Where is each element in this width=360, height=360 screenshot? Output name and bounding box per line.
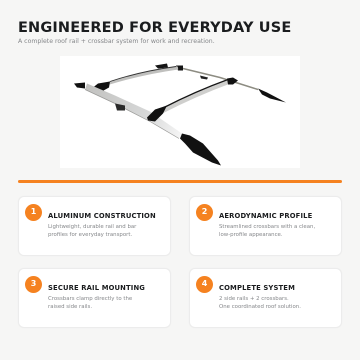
card 1 heading: ALUMINUM CONSTRUCTION [48,212,156,220]
card 2 text: Streamlined crossbars with a clean, [219,224,315,230]
orange divider [18,180,342,183]
card 3 heading: SECURE RAIL MOUNTING [48,284,145,292]
card 3 [18,268,171,328]
card 4 heading: COMPLETE SYSTEM [219,284,295,292]
card 2 text [219,224,315,238]
card 1 [18,196,171,256]
badge 4 [196,276,213,293]
card 1 text [48,224,136,238]
card 1 text: profiles for everyday transport. [48,232,132,238]
card 2 [189,196,342,256]
badge 1 [25,204,42,221]
card 3 text [48,296,132,310]
card 3 text: Crossbars clamp directly to the [48,296,132,302]
front crossbar [147,77,238,121]
badge 4: 4 [202,279,207,288]
badge 3: 3 [31,279,36,288]
title: ENGINEERED FOR EVERYDAY USE [18,20,291,36]
badge 3 [25,276,42,293]
card 3 text: raised side rails. [48,304,92,310]
subtitle: A complete roof rail + crossbar system for work and recreation. [18,38,215,45]
card 2 heading: AERODYNAMIC PROFILE [219,212,312,220]
card 4 text [219,296,301,310]
product image: roof rails and crossbars [60,56,300,168]
back side rail [155,63,286,102]
card 1 text: Lightweight, durable rail and bar [48,224,136,230]
card 4 [189,268,342,328]
card 4 text: One coordinated roof solution. [219,304,301,310]
badge 2: 2 [202,207,207,216]
card 2 text: low-profile appearance. [219,232,283,238]
rear crossbar [93,66,178,92]
card 4 text: 2 side rails + 2 crossbars. [219,296,289,302]
badge 2 [196,204,213,221]
badge 1: 1 [31,207,36,216]
front side rail [74,82,221,165]
